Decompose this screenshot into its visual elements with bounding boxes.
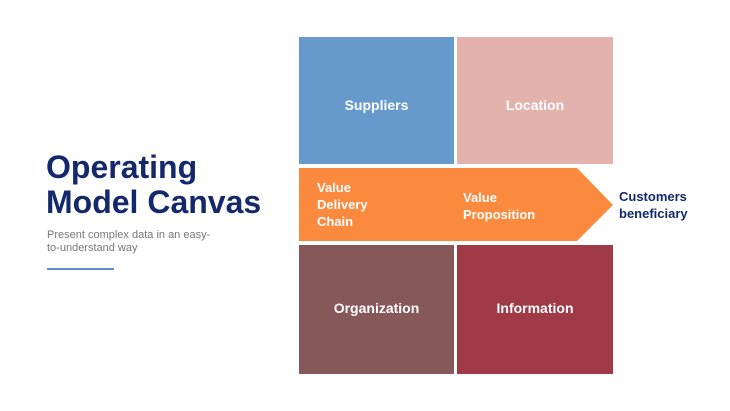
panel: information: Information [496, 300, 574, 316]
panel: information [457, 245, 613, 374]
text: value delivery chain: Chain [317, 214, 353, 229]
text: value delivery chain: Value [317, 180, 351, 195]
panel: organization [299, 245, 454, 374]
title [46, 149, 261, 220]
subtitle: to-understand way [47, 242, 138, 254]
panel: location [457, 37, 613, 164]
panel: suppliers: Suppliers [345, 96, 408, 112]
text: customers: beneficiary [619, 206, 688, 221]
text: value proposition: Proposition [463, 207, 535, 222]
text: value proposition: Value [463, 190, 497, 205]
subtitle: Present complex data in an easy- [47, 229, 210, 241]
text: value delivery chain: Delivery [317, 197, 368, 212]
arrow: value chain [299, 168, 613, 241]
text: value delivery chain [317, 180, 368, 229]
panel: location: Location [506, 96, 564, 112]
panel: suppliers [299, 37, 454, 164]
accent line [47, 268, 114, 270]
subtitle [47, 229, 210, 254]
panel: organization: Organization [334, 300, 419, 316]
title: Operating [46, 149, 197, 185]
text: customers: Customers [619, 189, 687, 204]
title: Model Canvas [46, 184, 261, 220]
text: value proposition [463, 190, 535, 222]
text: customers [619, 189, 688, 221]
